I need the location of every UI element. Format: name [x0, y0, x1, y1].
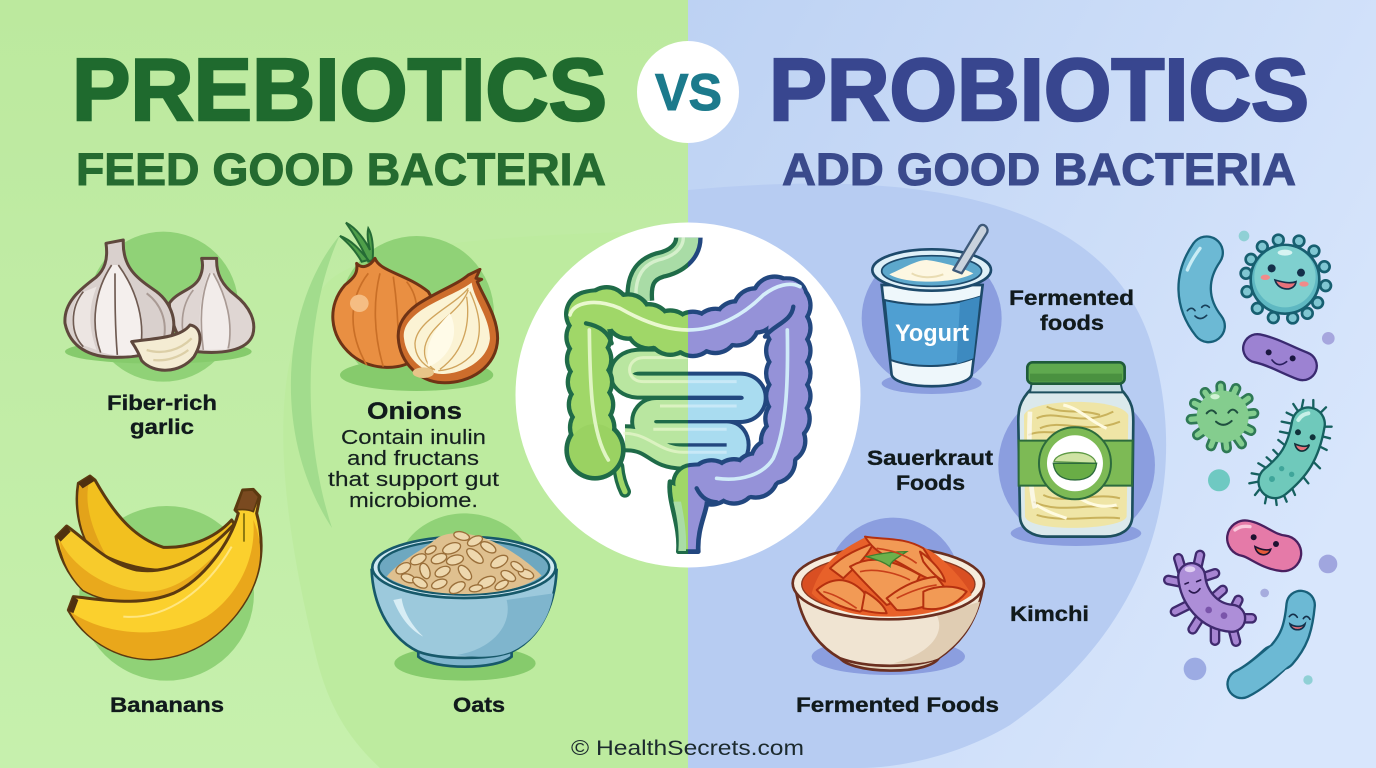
text: onions description [328, 427, 500, 512]
text: onions description: Contain inulin [341, 427, 486, 449]
rectum [670, 482, 707, 552]
panel: prebiotics background [0, 0, 688, 768]
label: sauerkraut foods: Sauerkraut [867, 447, 993, 470]
label: fermented foods: Fermented Foods [796, 694, 999, 717]
bacterium: teal rod with hairs [1249, 400, 1332, 505]
panel: probiotics background [688, 0, 1376, 768]
vs badge: VS [655, 64, 722, 122]
bacterium: blue rod [1187, 248, 1209, 326]
icon: intestines [564, 238, 800, 552]
colon outline [588, 297, 788, 483]
label: oats: Oats [453, 694, 505, 717]
label: fiber-rich garlic [107, 392, 217, 439]
title: probiotics: PROBIOTICS [769, 40, 1309, 139]
colon fill [588, 297, 788, 483]
text: onions description: and fructans [347, 448, 479, 470]
icon: yogurt cup [862, 225, 1002, 394]
label: fermented foods (yogurt) [1009, 287, 1134, 335]
footer credit: © HealthSecrets.com [571, 737, 804, 760]
label: sauerkraut foods [867, 447, 993, 495]
label: fermented foods (yogurt): Fermented [1009, 287, 1134, 310]
label: fermented foods (yogurt): foods [1040, 312, 1104, 335]
appendix [618, 467, 625, 492]
highlights [570, 284, 800, 330]
inner corner lines [586, 323, 612, 343]
icon: bananas [56, 476, 261, 681]
icon: kimchi bowl [793, 518, 984, 675]
label: kimchi: Kimchi [1010, 603, 1089, 626]
label: fiber-rich garlic: Fiber-rich [107, 392, 217, 415]
subtitle: add good bacteria: ADD GOOD BACTERIA [782, 144, 1296, 195]
gut illustration circle [516, 222, 860, 568]
bacterium: blue segmented [1242, 605, 1310, 684]
vs badge [637, 41, 739, 143]
label: bananas: Bananans [110, 694, 224, 717]
icon: garlic [65, 232, 254, 382]
bacterium: purple with legs [1168, 555, 1252, 642]
icon: oats bowl [372, 513, 557, 681]
label: onions heading: Onions [367, 398, 462, 425]
decorative dots [1184, 231, 1337, 685]
small intestine [622, 362, 754, 457]
title: prebiotics: PREBIOTICS [72, 40, 607, 139]
text: onions description: that support gut [328, 469, 500, 491]
bacteria cluster [1168, 231, 1337, 685]
subtitle: feed good bacteria: FEED GOOD BACTERIA [76, 144, 606, 195]
bacterium: green spiky [1191, 386, 1254, 448]
icon: onions [333, 223, 498, 391]
label: sauerkraut foods: Foods [896, 472, 965, 495]
bacterium: purple rod [1257, 348, 1303, 366]
icon: sauerkraut jar [998, 362, 1155, 546]
bacterium: pink [1235, 526, 1283, 555]
label: fiber-rich garlic: garlic [130, 416, 194, 439]
stomach tube [640, 238, 688, 302]
text: onions description: microbiome. [349, 490, 478, 512]
bacterium: round with nubs [1241, 235, 1331, 323]
yogurt label text: Yogurt [895, 320, 969, 347]
